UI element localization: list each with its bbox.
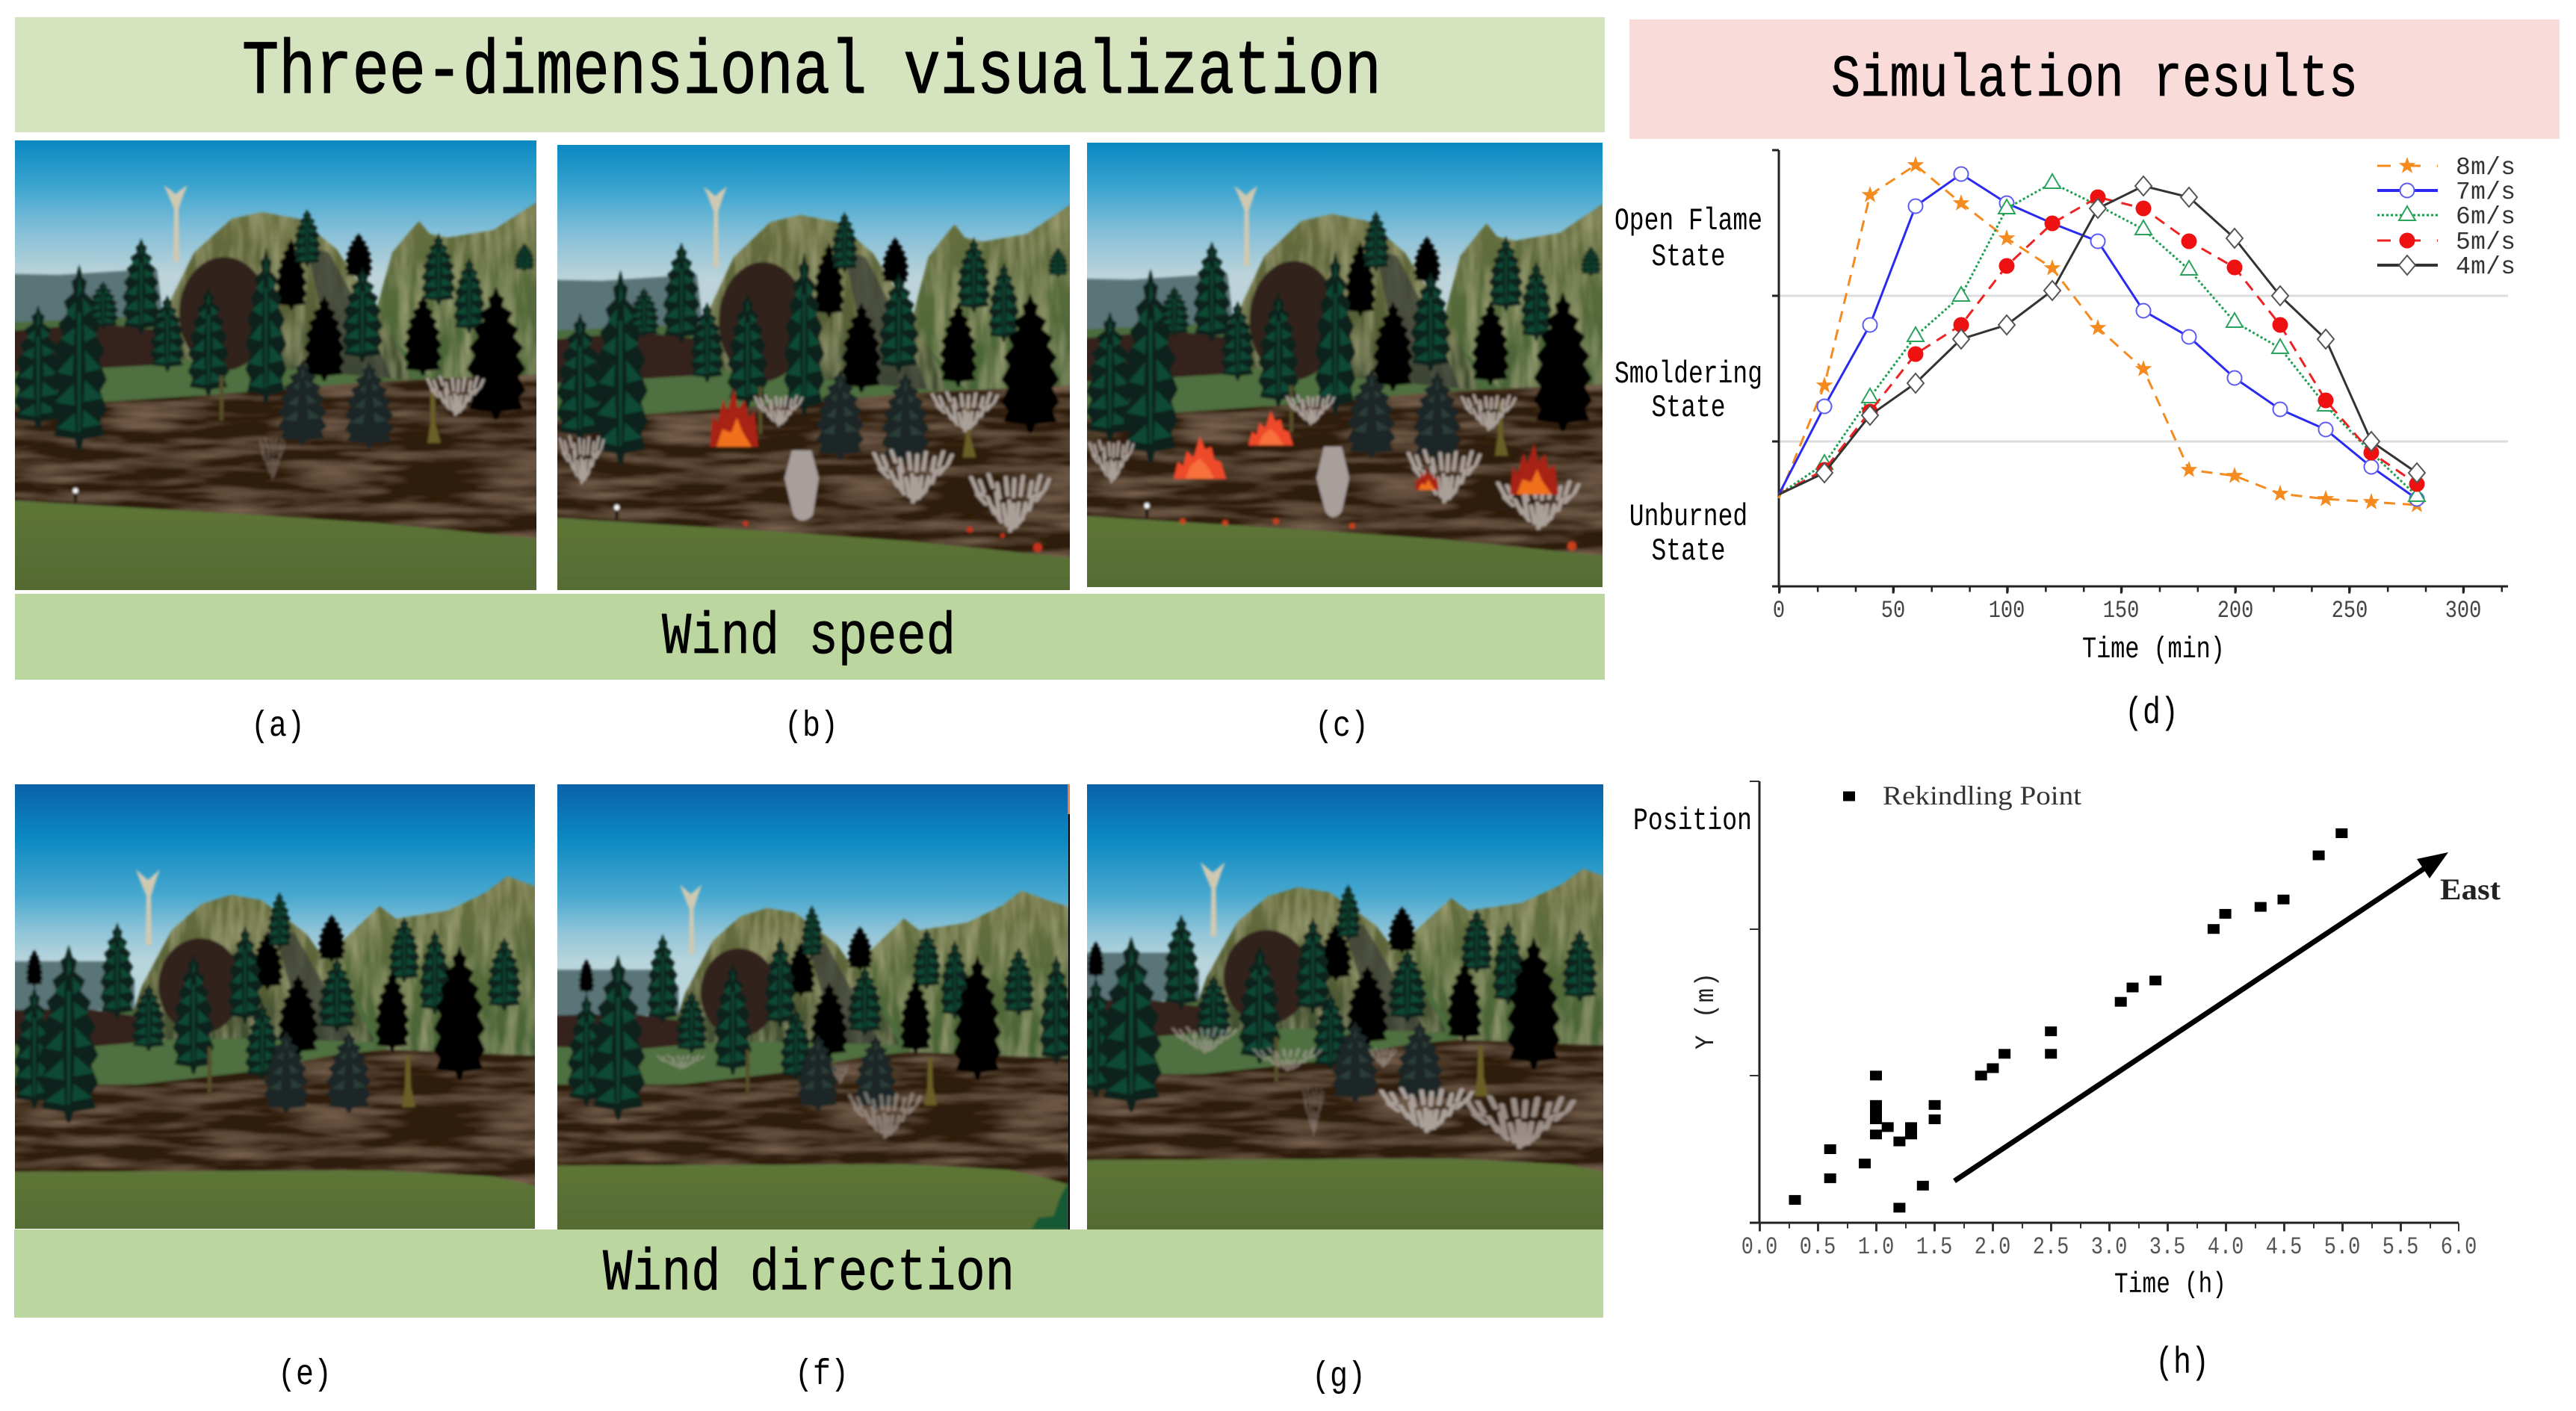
heading band: Three-dimensional visualization xyxy=(15,17,1605,132)
caption (b): (b) xyxy=(784,707,838,747)
series: 5 m/s xyxy=(1779,190,2425,494)
x-axis title: Time (h) xyxy=(2114,1268,2226,1301)
band: Wind direction xyxy=(14,1229,1603,1318)
series: 6 m/s xyxy=(1779,174,2425,501)
heading band: Three-dimensional visualization: Three-dimensional visualization xyxy=(242,29,1381,116)
x-axis tick labels: 1.0 xyxy=(1858,1233,1894,1261)
x-axis tick labels: 3.5 xyxy=(2149,1233,2185,1261)
x-axis tick labels: 0 xyxy=(1773,597,1785,624)
axes xyxy=(1750,781,2459,1227)
x-axis tick labels: 2.0 xyxy=(1975,1233,2010,1261)
y-axis state labels: Smoldering xyxy=(1614,358,1762,392)
y-axis state labels: Open Flame xyxy=(1614,205,1762,239)
x-axis tick labels: 250 xyxy=(2332,597,2368,624)
x-axis tick labels: 2.5 xyxy=(2033,1233,2069,1261)
x-axis tick labels: 3.0 xyxy=(2091,1233,2127,1261)
panel (c): 3D scene, wind speed stage 3 with more fire xyxy=(1087,143,1603,587)
series: 4 m/s xyxy=(1779,176,2425,494)
panel (b): 3D scene, wind speed stage 2 with fire xyxy=(557,145,1070,590)
x-axis tick labels: 5.5 xyxy=(2383,1233,2418,1261)
x-axis tick labels: 0.5 xyxy=(1800,1233,1836,1261)
x-axis tick labels: 100 xyxy=(1989,597,2025,624)
x-axis tick labels: 4.0 xyxy=(2208,1233,2244,1261)
y-axis state labels: State xyxy=(1651,241,1726,275)
legend: 4m/s xyxy=(2456,253,2515,281)
x-axis title: Time (min) xyxy=(2082,633,2225,666)
series: 7 m/s xyxy=(1779,167,2424,506)
x-axis tick labels: 200 xyxy=(2217,597,2253,624)
y-axis state labels xyxy=(1614,205,1762,569)
legend: 8m/s xyxy=(2456,154,2515,182)
caption (f): (f) xyxy=(795,1355,849,1395)
heading band: Simulation results: Simulation results xyxy=(1831,46,2358,114)
y-axis position label: Position xyxy=(1633,804,1752,839)
x-axis tick labels: 4.5 xyxy=(2266,1233,2302,1261)
scatter chart (h): rekindling points over time xyxy=(1633,781,2501,1301)
legend: 7m/s xyxy=(2456,179,2515,206)
x-axis tick labels: 6.0 xyxy=(2441,1233,2477,1261)
panel (a): 3D scene, wind speed stage 1 xyxy=(15,140,536,590)
legend: 6m/s xyxy=(2456,203,2515,231)
rekindling points xyxy=(1789,828,2347,1212)
band: Wind speed xyxy=(15,594,1605,680)
series: 8 m/s xyxy=(1779,156,2425,512)
caption (g): (g) xyxy=(1312,1357,1366,1398)
caption (e): (e) xyxy=(278,1355,332,1395)
caption (h): (h) xyxy=(2155,1342,2209,1384)
panel (g): 3D scene, wind direction stage 3 xyxy=(1087,784,1603,1229)
arrow: east direction xyxy=(1954,852,2448,1181)
x-axis tick labels: 300 xyxy=(2445,597,2481,624)
legend xyxy=(2377,154,2515,281)
y-axis state labels: State xyxy=(1651,391,1726,426)
label: East: East xyxy=(2440,872,2501,906)
caption (a): (a) xyxy=(251,707,305,747)
x-axis tick labels: 150 xyxy=(2103,597,2139,624)
x-axis tick labels: 0.0 xyxy=(1741,1233,1777,1261)
panel (e): 3D scene, wind direction stage 1 xyxy=(15,784,535,1229)
y-axis state labels: Unburned xyxy=(1629,500,1747,535)
x-axis tick labels: 50 xyxy=(1881,597,1905,624)
caption (c): (c) xyxy=(1315,707,1369,747)
y-axis title: Y (m) xyxy=(1692,973,1722,1049)
panel (f): 3D scene, wind direction stage 2 xyxy=(557,784,1070,1229)
legend: 5m/s xyxy=(2456,229,2515,256)
x-axis tick labels xyxy=(1741,1233,2477,1261)
band: Wind direction: Wind direction xyxy=(603,1241,1015,1307)
line chart (d): fire state over time by wind speed xyxy=(1614,150,2515,666)
caption (d): (d) xyxy=(2125,692,2179,734)
legend: rekindling point: Rekindling Point xyxy=(1883,781,2081,810)
heading band: Simulation results xyxy=(1629,19,2560,139)
band: Wind speed: Wind speed xyxy=(662,604,956,671)
x-axis tick labels: 1.5 xyxy=(1916,1233,1952,1261)
x-axis tick labels: 5.0 xyxy=(2324,1233,2360,1261)
x-axis tick labels xyxy=(1773,597,2481,624)
y-axis state labels: State xyxy=(1651,535,1726,569)
grid lines and axes xyxy=(1772,150,2508,590)
